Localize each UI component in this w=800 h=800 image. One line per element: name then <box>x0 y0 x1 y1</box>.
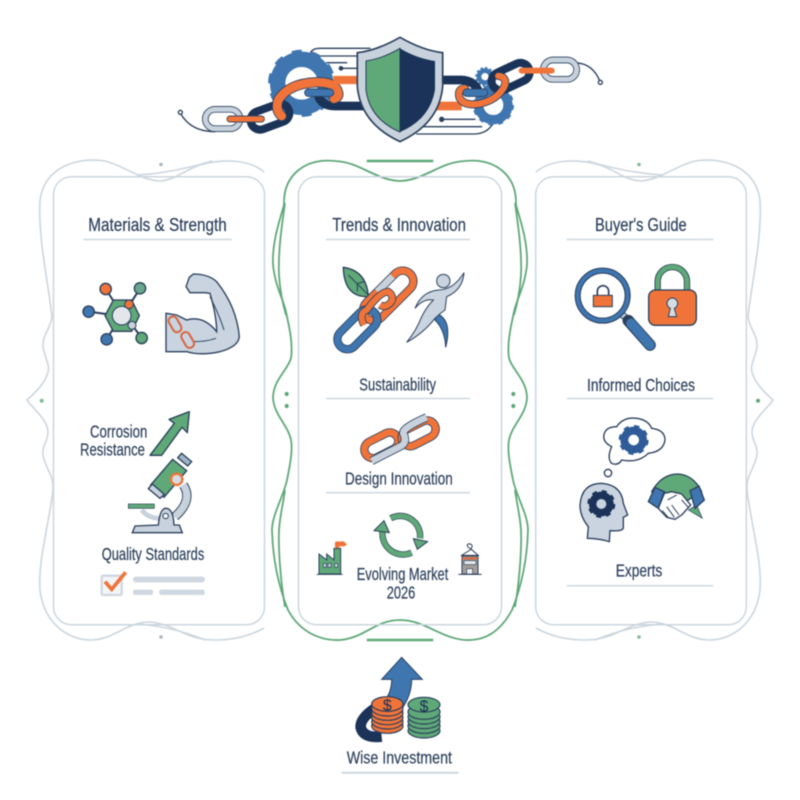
right panel dots <box>637 163 760 639</box>
label: evolving market 2026 <box>357 564 448 602</box>
blue arrow <box>382 657 422 707</box>
dollar signs: $ <box>383 698 392 715</box>
right gray link <box>543 60 577 79</box>
left panel dots <box>40 163 163 639</box>
right panel outer ornament <box>536 160 773 640</box>
left gray link <box>205 109 240 129</box>
label: sustainability: Sustainability <box>359 375 436 395</box>
dollar signs: $ <box>420 698 429 715</box>
icon: rising arrow <box>150 412 189 455</box>
green coin stack <box>408 697 440 738</box>
navy swoosh <box>361 708 382 737</box>
label: evolving market 2026: 2026 <box>387 582 415 602</box>
icon: microscope <box>128 453 192 533</box>
navy link under shield left <box>318 96 367 106</box>
left orange bar <box>230 108 261 129</box>
panel: materials and strength <box>54 177 264 625</box>
icon: design chain link <box>361 417 439 461</box>
heading: materials and strength: Materials & Strength <box>88 215 227 235</box>
label: corrosion resistance <box>80 422 147 459</box>
label: quality standards: Quality Standards <box>102 544 204 564</box>
icon: factory <box>317 541 347 574</box>
label: informed choices: Informed Choices <box>587 375 695 395</box>
orange coin stack <box>372 697 403 733</box>
icon: thought bubble with gear <box>604 418 665 477</box>
label: wise investment: Wise Investment <box>347 747 452 767</box>
heading: trends and innovation: Trends & Innovation <box>332 215 466 235</box>
icon: molecule <box>83 283 147 345</box>
icon: handshake <box>648 474 704 519</box>
heading: buyer's guide: Buyer's Guide <box>595 215 687 235</box>
circuit lines behind shield <box>178 48 602 134</box>
right navy and orange links <box>437 60 533 106</box>
center panel outer ornament <box>272 161 528 640</box>
icon: magnifying glass with lock <box>578 271 650 345</box>
left gear <box>272 53 332 113</box>
orange link left <box>277 80 362 116</box>
label: evolving market 2026: Evolving Market <box>357 564 448 584</box>
shield <box>357 37 443 142</box>
icon: store with hanger <box>458 544 482 574</box>
right gears <box>475 68 512 123</box>
label: corrosion resistance: Corrosion <box>90 422 147 442</box>
label: corrosion resistance: Resistance <box>80 439 145 459</box>
icon: head with gear <box>580 483 628 542</box>
label: experts: Experts <box>616 561 662 581</box>
header illustration: chain, gears and shield <box>178 37 602 142</box>
icon: padlock <box>649 267 696 325</box>
dollar signs <box>383 698 429 715</box>
icon: flexed arm with chain <box>166 274 239 354</box>
icon: leaf and chain <box>333 266 418 353</box>
icon: recycle arrows <box>374 516 428 555</box>
center panel dots <box>285 392 515 408</box>
panel: trends and innovation <box>298 177 502 625</box>
right orange bar <box>522 62 552 80</box>
label: design innovation: Design Innovation <box>345 468 453 488</box>
icon: checklist <box>102 572 205 595</box>
left navy link <box>248 101 292 132</box>
icon: wise investment coins and arrow <box>361 657 440 738</box>
icon: running figure <box>407 273 464 347</box>
panel: buyer's guide <box>536 177 746 625</box>
left panel outer ornament <box>27 160 264 640</box>
